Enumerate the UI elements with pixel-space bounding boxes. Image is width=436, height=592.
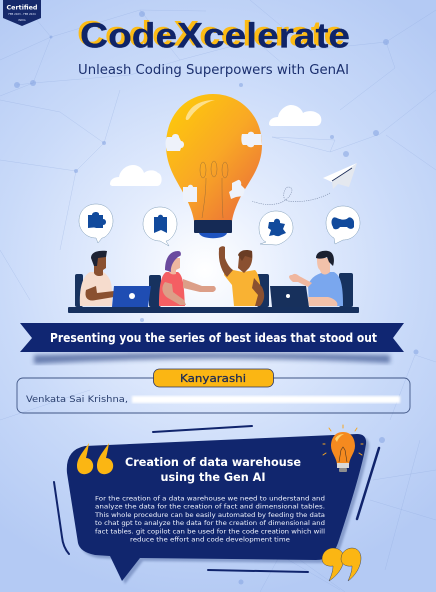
title: CodeXcelerate <box>80 16 350 56</box>
body text: reduce the effort and code development time <box>130 536 290 544</box>
badge: certified: INDIA <box>18 18 26 22</box>
badge: certified: Certified <box>6 4 38 12</box>
heading: using the Gen AI <box>160 470 266 484</box>
body text <box>94 496 325 544</box>
table <box>68 307 359 313</box>
banner <box>20 323 404 352</box>
person 4 <box>289 251 343 306</box>
icon: light bulb <box>166 94 262 238</box>
chairs <box>75 273 353 307</box>
body text: analyze the data for the creation of fact and dimensional tables. <box>95 504 325 510</box>
person 3 <box>219 246 264 306</box>
badge: certified: FEB 2023 - FEB 2024 <box>8 12 36 16</box>
laptop blue <box>112 286 151 307</box>
icon: small light bulb <box>323 425 363 472</box>
body text: For the creation of a data warehouse we need to understand and <box>95 496 325 502</box>
icon: cloud right <box>269 105 321 126</box>
badge: certified <box>3 0 41 26</box>
body text: fact tables. git copilot can be used for the code creation which will <box>95 528 325 536</box>
panel: Kanyarashi names box <box>17 369 410 413</box>
label pill <box>154 369 274 387</box>
body text: This whole procedure can be easily automated by feeding the data <box>94 512 325 519</box>
person 2 <box>159 251 216 306</box>
icon: closing quote <box>322 548 361 581</box>
names text: Venkata Sai Krishna, <box>26 395 128 405</box>
heading <box>125 455 301 484</box>
title: CodeXcelerate <box>77 14 345 54</box>
icon: opening quote <box>77 443 113 474</box>
laptop dark <box>270 286 309 307</box>
speech bubble: puzzle 3 <box>259 211 293 245</box>
banner: Presenting you the series of best ideas that stood out <box>50 330 377 345</box>
person 1 <box>80 251 114 306</box>
decorative strokes around callout <box>54 426 379 572</box>
panel: callout <box>67 434 369 584</box>
subtitle: Unleash Coding Superpowers with GenAI <box>78 63 349 78</box>
icon: cloud left <box>110 165 162 186</box>
speech bubble: puzzle 1 <box>79 204 113 243</box>
redacted names <box>132 396 400 403</box>
label pill: Kanyarashi <box>180 373 246 385</box>
icon: paper plane <box>252 163 357 204</box>
heading: Creation of data warehouse <box>125 455 301 469</box>
speech bubble: puzzle 4 <box>326 206 360 244</box>
banner shadow <box>34 352 390 364</box>
speech bubble: puzzle 2 <box>143 207 177 246</box>
body text: to chat gpt to analyze the data for the creation of dimensional and <box>95 520 325 527</box>
